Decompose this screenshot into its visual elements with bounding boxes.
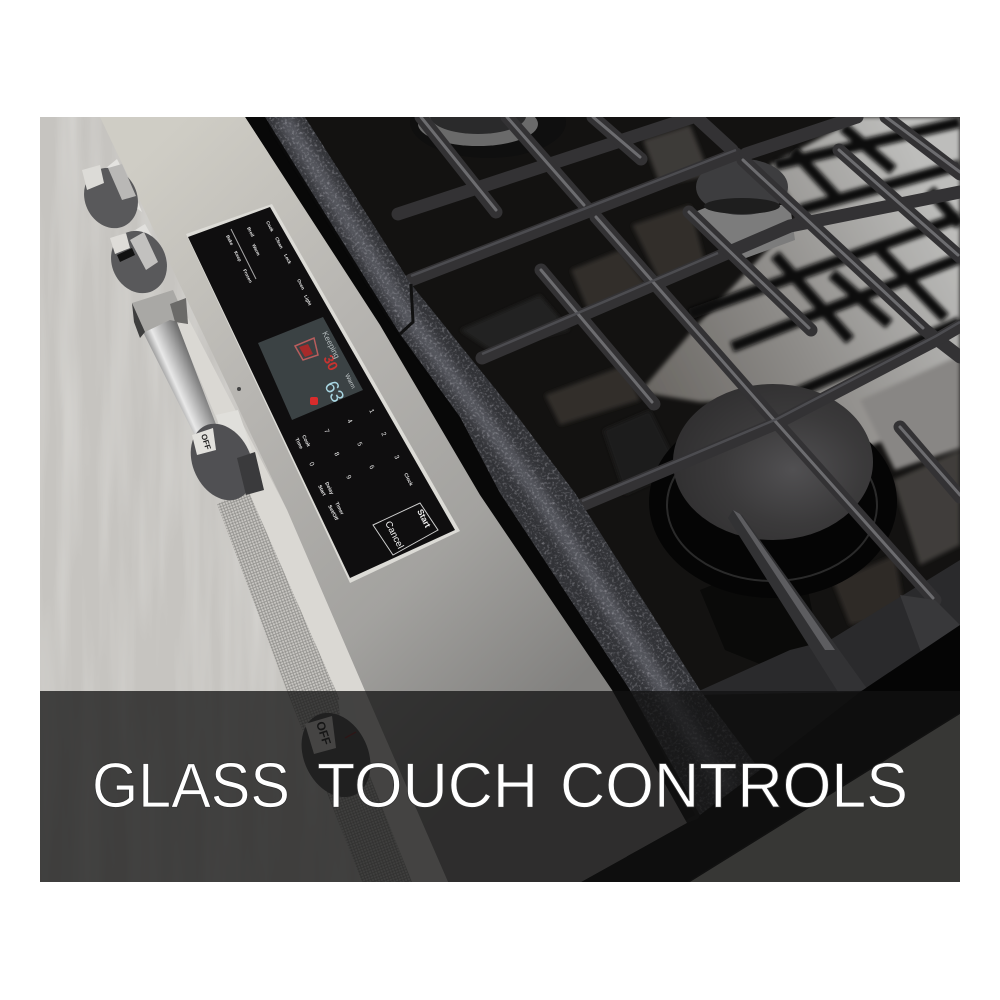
burner: rear <box>418 117 538 146</box>
black gasket <box>245 117 630 691</box>
top function labels: Cook <box>265 220 275 233</box>
keypad side labels: Start <box>316 484 327 497</box>
display: red temperature digits: 30 <box>320 352 342 373</box>
dark lower steel corner <box>581 823 687 882</box>
title: TOUCH <box>317 751 538 821</box>
caption banner <box>40 691 960 882</box>
top function labels: Broil <box>246 226 255 238</box>
glass control panel bezel <box>186 204 460 583</box>
keypad side labels: Delay <box>323 481 335 496</box>
top function labels: Warm <box>251 243 261 256</box>
cooktop base <box>250 117 960 882</box>
off label: OFF <box>313 720 334 747</box>
bright enamel reflections <box>640 117 960 625</box>
oven handle: knurled grip <box>217 490 412 882</box>
keypad digits: 5 <box>355 441 363 448</box>
keypad side labels: Timer <box>333 501 345 516</box>
top function labels: Keep <box>233 250 243 262</box>
keypad digits: 1 <box>367 408 375 415</box>
keypad digits <box>307 408 400 481</box>
top function labels: Bake <box>225 234 235 246</box>
keypad digits: 8 <box>332 451 340 458</box>
keypad digits: 3 <box>392 454 400 461</box>
front grate frame <box>690 560 960 695</box>
front cabinet surface <box>690 714 960 882</box>
off label: OFF <box>199 433 213 451</box>
top function labels: Clean <box>274 236 284 250</box>
keypad digits: 0 <box>307 461 315 468</box>
top function labels: Oven <box>296 278 306 291</box>
knob: top left <box>82 159 142 228</box>
glass control panel <box>188 207 455 578</box>
display: warm label: Warm <box>343 373 356 390</box>
oven handle: smooth rod <box>142 320 216 434</box>
title <box>92 751 908 821</box>
front grate finger <box>739 516 866 690</box>
cancel label: Cancel <box>382 519 406 551</box>
display: red indicator <box>310 397 318 405</box>
keypad digits: 6 <box>367 464 375 471</box>
front right grate leg <box>900 595 960 651</box>
burner: small right <box>690 159 795 262</box>
stainless steel control strip <box>100 117 687 882</box>
wood floor <box>40 117 365 882</box>
keypad side labels: Set/Off <box>326 504 339 522</box>
grate highlights <box>421 117 960 598</box>
reflected black grate lines <box>690 122 960 400</box>
keypad digits: 9 <box>344 474 352 481</box>
product photo <box>40 86 960 882</box>
keypad side labels: Clock <box>402 472 414 487</box>
textured rail <box>260 117 770 817</box>
top function labels <box>225 220 313 307</box>
display: oven icon <box>295 338 318 360</box>
knob: lower with off label <box>302 700 370 797</box>
dark enamel reflections <box>460 125 710 495</box>
knob: second left <box>110 224 167 294</box>
lower knob red mark <box>345 732 356 738</box>
display: keeping label: Keeping <box>320 330 342 360</box>
display window <box>258 317 363 420</box>
divider line <box>231 229 256 279</box>
cast iron grates <box>398 117 960 600</box>
start label: Start <box>415 507 433 529</box>
keypad digits: 4 <box>345 418 353 425</box>
burner: large front <box>649 384 897 598</box>
keypad digits: 7 <box>322 428 330 435</box>
infographic canvas <box>40 117 960 882</box>
upper bracket <box>132 290 188 338</box>
title: GLASS <box>92 751 290 821</box>
start and cancel box <box>373 503 438 555</box>
black band at cooktop front <box>862 625 960 691</box>
keypad side labels: Time <box>293 437 304 450</box>
screw on steel <box>237 387 241 391</box>
keypad side labels: Cook <box>300 434 311 448</box>
title: CONTROLS <box>560 751 908 821</box>
light trim strip beside handle <box>178 318 365 691</box>
enamel tile front <box>700 586 812 664</box>
top function labels: Frozen <box>242 268 253 284</box>
keypad side labels <box>293 434 414 522</box>
top function labels: Light <box>303 294 313 307</box>
keypad digits: 2 <box>379 431 387 438</box>
display: time digits: 63 <box>320 378 348 406</box>
knob: centre with off label <box>190 410 264 500</box>
top function labels: Lock <box>283 253 293 265</box>
